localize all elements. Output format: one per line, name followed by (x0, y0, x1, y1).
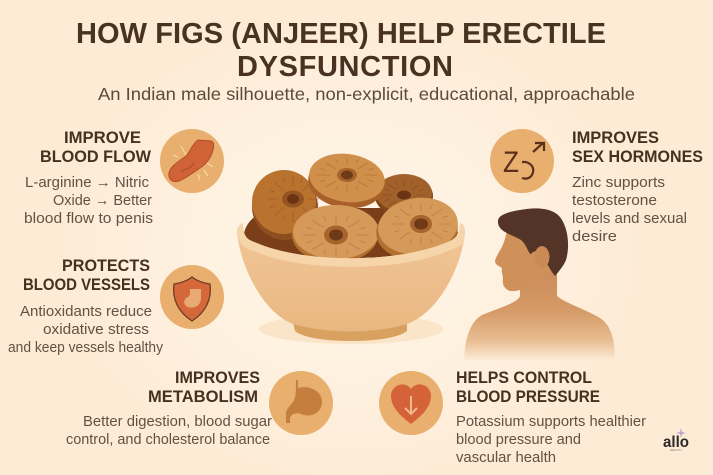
title (76, 18, 606, 83)
panel: improves sex hormones text: levels and sexual (572, 210, 687, 227)
panel: improve blood flow text: L-arginine → Nitric (25, 174, 149, 191)
icon: heart with down arrow (379, 371, 443, 435)
panel: helps control blood pressure text (456, 368, 646, 466)
panel: improves metabolism text: control, and cholesterol balance (66, 431, 270, 448)
panel: helps control blood pressure text: HELPS CONTROL (456, 368, 592, 387)
icon: shield (160, 265, 224, 329)
bowl rim (237, 223, 465, 267)
icon: blood vessel (160, 129, 224, 193)
icon: zinc symbol with up arrow (490, 129, 554, 193)
panel: improves metabolism text: IMPROVES (175, 368, 260, 387)
icon: zinc symbol with up arrow: Z (503, 146, 519, 179)
panel: improves sex hormones text: desire (572, 228, 617, 245)
face (495, 222, 556, 291)
panel: helps control blood pressure text: BLOOD PRESSURE (456, 387, 600, 406)
panel: improve blood flow text: blood flow to penis (24, 210, 153, 227)
logo: allo health (663, 428, 689, 452)
panel: protects blood vessels text: Antioxidants reduce (20, 303, 152, 320)
logo: allo health: HEALTH (670, 448, 682, 452)
panel: improves sex hormones text: IMPROVES (572, 128, 659, 147)
bowl of figs (237, 149, 465, 344)
fig: top (305, 149, 388, 213)
figs fill (243, 208, 458, 258)
panel: improves sex hormones text (572, 128, 703, 245)
panel: helps control blood pressure text: vascular health (456, 449, 556, 466)
male silhouette (464, 208, 615, 360)
fig: front centre (292, 205, 379, 263)
fig: back left (246, 164, 324, 246)
panel: protects blood vessels text: and keep vessels healthy (8, 339, 163, 356)
title: DYSFUNCTION (237, 51, 453, 83)
panel: protects blood vessels text: PROTECTS (62, 256, 150, 275)
panel: improve blood flow text: IMPROVE (64, 128, 141, 147)
panel: improve blood flow text: BLOOD FLOW (40, 147, 152, 166)
panel: improves sex hormones text: testosterone (572, 192, 657, 209)
ear (534, 246, 550, 268)
panel: improves sex hormones text: SEX HORMONES (572, 147, 703, 166)
fig: back right (375, 174, 433, 217)
panel: protects blood vessels text: BLOOD VESSELS (23, 275, 150, 294)
icon: stomach (269, 371, 333, 435)
bowl foot (293, 322, 407, 341)
panel: helps control blood pressure text: Potassium supports healthier (456, 413, 646, 430)
panel: improves metabolism text (66, 368, 272, 448)
panel: improve blood flow text: Oxide → Better (53, 192, 152, 209)
bowl body (237, 223, 465, 332)
title: HOW FIGS (ANJEER) HELP ERECTILE (76, 18, 606, 50)
shoulders and neck (464, 262, 615, 360)
panel: improves sex hormones text: Zinc supports (572, 174, 665, 191)
fig: right (372, 193, 462, 264)
subtitle: An Indian male silhouette, non-explicit, educational, approachable (98, 84, 635, 104)
bowl shadow (259, 314, 443, 344)
panel: protects blood vessels text (8, 256, 163, 356)
panel: improve blood flow text (24, 128, 153, 227)
panel: protects blood vessels text: oxidative stress (43, 321, 149, 338)
panel: improves metabolism text: METABOLISM (148, 387, 258, 406)
panel: helps control blood pressure text: blood pressure and (456, 431, 581, 448)
logo: allo health: allo (663, 434, 689, 451)
panel: improves metabolism text: Better digestion, blood sugar (83, 413, 272, 430)
hair (498, 208, 568, 276)
